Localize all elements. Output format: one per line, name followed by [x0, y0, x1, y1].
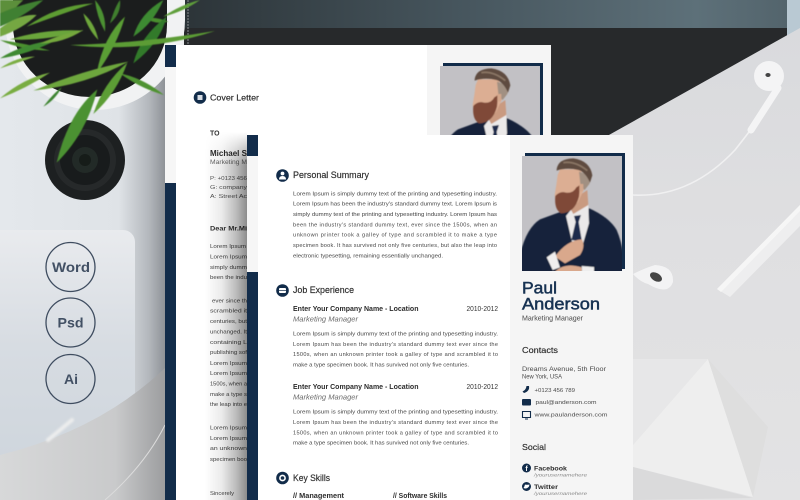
summary paragraph: unknown printer took a galley of type and scrambled it to make a type	[293, 233, 497, 239]
letter body: been the indu	[210, 275, 247, 281]
recipient block: TO	[210, 130, 220, 138]
format badges	[46, 242, 95, 404]
cover letter heading: Cover Letter	[210, 94, 259, 102]
heading: key skills: Key Skills	[293, 473, 330, 483]
recipient block: A: Street Ac	[210, 194, 247, 200]
contacts: New York, USA	[522, 374, 563, 380]
summary paragraph	[293, 191, 497, 260]
summary paragraph: specimen book. It has survived not only five centuries, but also the leap into	[293, 243, 497, 249]
letter body: scrambled it	[210, 309, 248, 315]
background: desk surface left	[0, 0, 165, 500]
summary paragraph: been the industry's standard dummy text, ever since the 1500s, when an	[293, 222, 497, 228]
job entry 1: Enter Your Company Name - Location	[293, 306, 418, 313]
contacts: paul@anderson.com	[536, 400, 597, 406]
earbud bottom left	[48, 420, 72, 440]
social	[522, 442, 587, 497]
icon: person	[276, 169, 289, 182]
contacts: Dreams Avenue, 5th Floor	[522, 366, 607, 373]
lower earbud	[633, 265, 673, 290]
job entry 2: 2010-2012	[466, 384, 498, 391]
letter body: Lorem Ipsum	[210, 254, 247, 260]
letter body	[210, 226, 248, 497]
name: Anderson	[522, 294, 600, 314]
curved paper bottom left	[0, 368, 165, 500]
job entry 2: make a type specimen book. It has survived not only five centuries.	[293, 441, 469, 447]
icon: facebook: f	[525, 466, 528, 473]
summary paragraph: Lorem Ipsum is simply dummy text of the printing and typesetting industry.	[293, 191, 497, 197]
icon: gear	[276, 472, 289, 484]
panel: resume sidebar	[510, 135, 633, 500]
name	[522, 278, 600, 314]
letter body: Lorem Ipsum	[210, 361, 247, 367]
heading: job experience: Job Experience	[293, 285, 354, 295]
summary paragraph: simply dummy text of the printing and typesetting industry. Lorem Ipsum has	[293, 212, 497, 218]
social: Facebook	[534, 466, 567, 472]
letter body: an unknown	[210, 446, 247, 452]
heading: personal summary: Personal Summary	[293, 170, 369, 180]
letter body: Lorem Ipsum	[210, 426, 247, 432]
icon: phone	[522, 386, 529, 393]
background: white area above cover page	[165, 0, 185, 45]
plant pot	[5, 0, 185, 110]
icon: monitor	[522, 412, 530, 419]
letter body: Lorem Ipsum	[210, 371, 247, 377]
job entry 2: Enter Your Company Name - Location	[293, 384, 418, 391]
job entry 2: Lorem Ipsum is simply dummy text of the printing and typesetting industry.	[293, 410, 498, 416]
icon: briefcase	[276, 284, 289, 297]
social: Twitter	[534, 484, 558, 491]
summary paragraph: electronic typesetting, remaining essentially unchanged.	[293, 254, 443, 260]
job entry 1	[293, 306, 498, 369]
cover page left stripe	[165, 45, 176, 500]
skills subheads: // Software Skills	[393, 493, 447, 500]
recipient block: Michael S	[210, 148, 247, 158]
letter body: publishing sof	[210, 350, 247, 356]
contacts: Contacts	[522, 345, 558, 355]
badge: Word: Word	[52, 259, 90, 275]
cover letter heading	[194, 91, 259, 104]
letter body: Sincerely	[210, 491, 234, 497]
panel: cover letter page	[165, 45, 551, 500]
letter body: containing L	[210, 340, 247, 346]
letter body: specimen boo	[210, 457, 247, 463]
section: key skills	[276, 472, 447, 500]
white stick	[717, 205, 800, 297]
top earbud and cable	[633, 61, 784, 195]
job entry 2: Marketing Manager	[293, 394, 359, 402]
icon: twitter	[522, 482, 531, 491]
job entry 1: Lorem Ipsum has been the industry's standard dummy text ever since the	[293, 342, 498, 348]
section: job experience	[276, 284, 498, 447]
letter body: 1500s, when a	[210, 382, 248, 388]
plant leaves	[0, 0, 215, 163]
letter body: centuries, but	[210, 319, 247, 325]
job entry 2: Lorem Ipsum has been the industry's standard dummy text ever since the	[293, 420, 498, 426]
shadow cast by resume page	[212, 134, 247, 500]
contacts: www.paulanderson.com	[533, 412, 608, 418]
resume left stripe	[247, 135, 258, 500]
badge: Ai	[46, 354, 95, 404]
letter body: simply dumm	[210, 265, 247, 271]
recipient block: P: +0123 456	[210, 176, 247, 182]
letter body: Lorem Ipsum	[210, 244, 246, 250]
letter body: the leap into e	[210, 402, 247, 408]
job entry 2	[293, 384, 498, 447]
letter body: make a type s	[210, 392, 247, 398]
letter body: Lorem Ipsum	[210, 436, 247, 442]
contacts	[522, 345, 608, 419]
name: Paul	[522, 278, 557, 298]
icon: mail	[522, 399, 531, 406]
camera lens	[45, 120, 125, 200]
badge: Psd: Psd	[58, 314, 84, 330]
social: /yourusernamehere	[533, 491, 587, 497]
badge: Ai: Ai	[64, 371, 78, 387]
panel: resume page	[247, 135, 510, 500]
background: dark keyboard	[184, 0, 800, 148]
skills subheads	[293, 493, 447, 500]
cover page sidebar	[427, 45, 551, 135]
tablet surface	[0, 230, 135, 460]
job entry 1: 2010-2012	[466, 306, 498, 313]
cover page photo	[438, 63, 543, 183]
paper pyramid	[633, 359, 768, 500]
job title: Marketing Manager	[522, 316, 584, 322]
recipient block: G: company	[210, 185, 247, 191]
background: light paper right	[600, 28, 800, 500]
summary paragraph: Lorem Ipsum has been the industry's standard dummy text. Lorem Ipsum is	[293, 202, 497, 208]
job entry 1: 1500s, when an unknown printer took a galley of type and scrambled it to	[293, 352, 498, 358]
portrait photo	[520, 153, 625, 273]
job entry 1: Lorem Ipsum is simply dummy text of the printing and typesetting industry.	[293, 332, 498, 338]
job entry 2: 1500s, when an unknown printer took a galley of type and scrambled it to	[293, 430, 498, 436]
recipient block	[210, 130, 247, 200]
badge: Psd	[46, 298, 95, 347]
letter body: Dear Mr.Mi	[210, 226, 247, 232]
badge: Word	[46, 242, 95, 292]
skills subheads: // Management	[293, 493, 345, 500]
letter body: unchanged. It	[210, 330, 247, 336]
job entry 1: Marketing Manager	[293, 316, 359, 324]
section: personal summary	[276, 169, 497, 260]
recipient block: Marketing M	[210, 159, 247, 166]
social: /yourusernamehere	[533, 472, 587, 478]
letter body: ever since th	[212, 298, 247, 304]
social: Social	[522, 442, 546, 452]
job entry 1: make a type specimen book. It has survived not only five centuries.	[293, 363, 469, 369]
contacts: +0123 456 789	[534, 388, 575, 394]
